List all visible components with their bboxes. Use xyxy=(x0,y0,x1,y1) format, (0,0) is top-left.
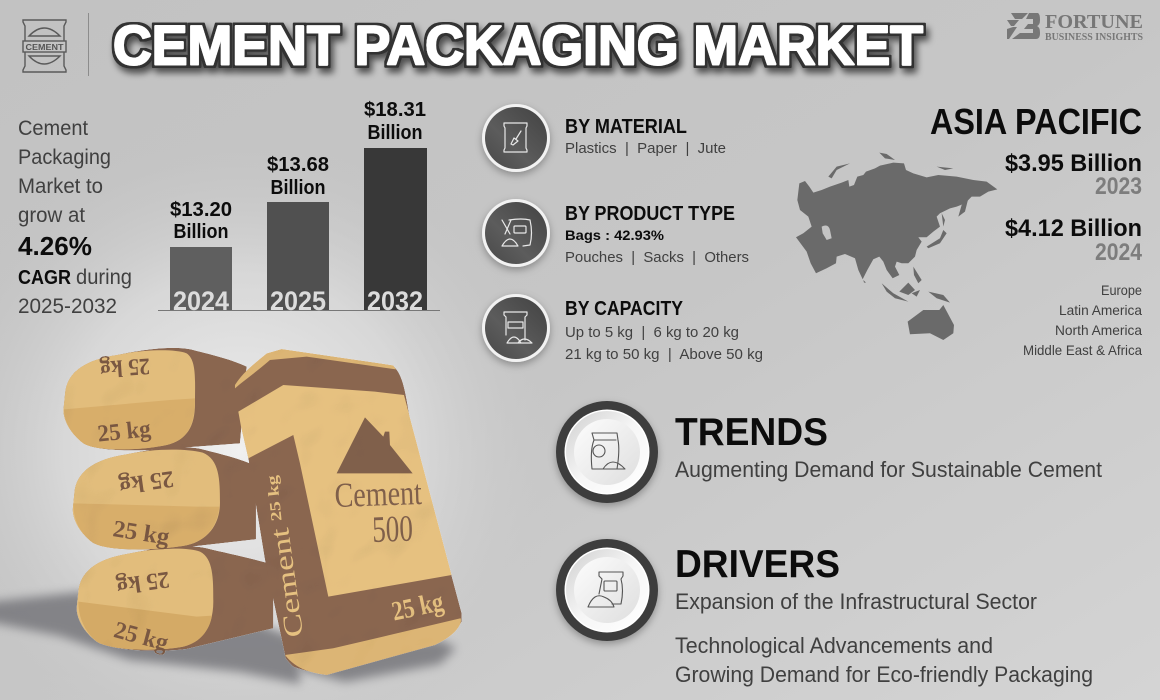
icon: by product type xyxy=(482,199,550,267)
text: Asia Pacific region: North America xyxy=(1055,322,1142,338)
bag: middle of stack: 25 kg xyxy=(117,465,175,498)
bag: bottom of stack: 25 kg xyxy=(111,617,171,657)
text: trends: Augmenting Demand for Sustainable Cement xyxy=(675,457,1102,482)
text: by product type: Bags : 42.93% xyxy=(565,227,665,243)
icon: by material xyxy=(482,104,550,172)
bag: front standing xyxy=(235,349,462,675)
title: CEMENT PACKAGING MARKET xyxy=(113,14,923,76)
text: drivers: Technological Advancements and xyxy=(675,633,993,658)
bar chart: Billion xyxy=(270,177,326,199)
bar chart: 2032 xyxy=(367,286,423,316)
text: drivers: Growing Demand for Eco-friendly Packaging xyxy=(675,662,1093,687)
bag: middle of stack: 25 kg xyxy=(111,516,171,551)
text: by capacity: Up to 5 kg | 6 kg to 20 kg xyxy=(565,324,739,341)
illustration: stacked cement bags xyxy=(63,348,462,675)
logo: Fortune Business Insights xyxy=(1007,11,1143,43)
text: by product type: Pouches | Sacks | Others xyxy=(565,249,749,266)
bar chart xyxy=(158,99,440,316)
bar chart: Billion xyxy=(174,221,228,243)
text: Asia Pacific region: 2023 xyxy=(1095,173,1142,200)
text: by product type: BY PRODUCT TYPE xyxy=(565,203,735,225)
floor shadow xyxy=(0,592,456,684)
bar chart: $13.68 xyxy=(267,154,329,176)
logo: Fortune Business Insights: FORTUNE xyxy=(1045,11,1143,33)
text: CAGR statement: Market to xyxy=(18,175,103,198)
icon: by capacity xyxy=(482,294,550,362)
icon: drivers xyxy=(556,539,658,641)
bag: top of stack xyxy=(63,348,247,450)
text: by capacity xyxy=(565,298,763,363)
text: trends: TRENDS xyxy=(675,411,828,454)
bar chart: $18.31 xyxy=(364,99,426,121)
icon: cement bag logo xyxy=(23,20,66,72)
text: Asia Pacific region xyxy=(930,101,1143,358)
bag: front standing: 25 kg xyxy=(389,586,446,627)
bag: top of stack: 25 kg xyxy=(96,416,152,448)
map: Asia Pacific xyxy=(796,153,997,340)
logo: Fortune Business Insights: BUSINESS INSIGHTS xyxy=(1045,31,1143,43)
text: Asia Pacific region: ASIA PACIFIC xyxy=(930,101,1142,142)
text: trends xyxy=(675,411,1102,482)
bar chart: Billion xyxy=(368,122,422,144)
text: by capacity: 21 kg to 50 kg | Above 50 kg xyxy=(565,346,763,363)
bag: bottom of stack: 25 kg xyxy=(115,566,171,599)
bag: bottom of stack xyxy=(77,546,273,657)
text: by product type xyxy=(565,203,749,266)
text: CAGR statement: during xyxy=(76,266,132,289)
text: CAGR statement: Cement xyxy=(18,117,88,140)
text: drivers: Expansion of the Infrastructural Sector xyxy=(675,589,1037,614)
text: Asia Pacific region: $4.12 Billion xyxy=(1005,215,1142,242)
bag: front standing: Cement xyxy=(264,525,309,639)
text: Asia Pacific region: Middle East & Africa xyxy=(1023,342,1142,358)
bag: front standing: Cement xyxy=(334,473,423,515)
icon: cement bag logo: CEMENT xyxy=(26,42,64,52)
text: Asia Pacific region: 2024 xyxy=(1095,239,1143,266)
text: CAGR statement: CAGR xyxy=(18,267,71,289)
bag: top of stack: 25 kg xyxy=(99,352,151,382)
bar chart: $13.20 xyxy=(170,199,232,221)
icon: trends xyxy=(556,401,658,503)
text: drivers xyxy=(675,543,1093,687)
text: drivers: DRIVERS xyxy=(675,543,840,586)
text: CAGR statement: 2025-2032 xyxy=(18,295,117,318)
bag: front standing: 500 xyxy=(372,509,414,551)
text: Asia Pacific region: $3.95 Billion xyxy=(1005,150,1142,177)
text: by material xyxy=(565,116,726,157)
text: CAGR statement: 4.26% xyxy=(18,231,92,261)
bar chart: 2024 xyxy=(173,286,229,316)
bag: middle of stack xyxy=(73,447,256,551)
text: Asia Pacific region: Europe xyxy=(1101,282,1142,298)
bag: front standing: 25 kg xyxy=(264,474,286,522)
text: by capacity: BY CAPACITY xyxy=(565,298,684,320)
text: CAGR statement xyxy=(18,117,132,318)
text: Asia Pacific region: Latin America xyxy=(1059,302,1142,318)
bar chart: 2025 xyxy=(270,286,326,316)
text: by material: Plastics | Paper | Jute xyxy=(565,140,726,157)
text: CAGR statement: Packaging xyxy=(18,146,111,169)
logo divider xyxy=(88,13,89,76)
text: CAGR statement: grow at xyxy=(18,204,85,227)
text: by material: BY MATERIAL xyxy=(565,116,687,138)
